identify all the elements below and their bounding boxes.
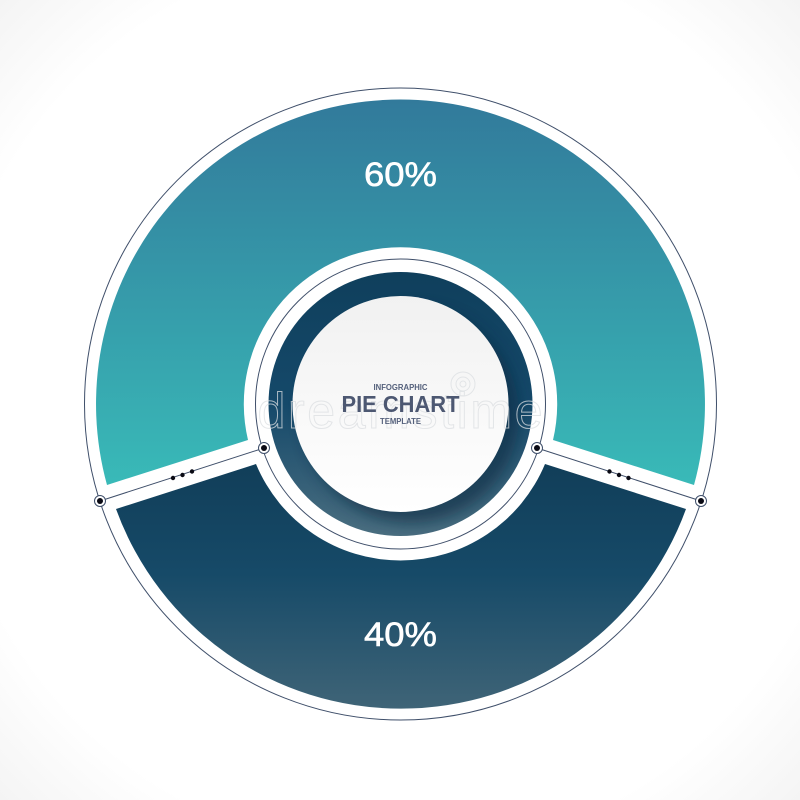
node: right outer [696,496,706,506]
text: template: TEMPLATE [380,417,422,426]
label: 40%: 40% [364,616,437,654]
disc shadow [303,307,519,523]
watermark logo [451,372,475,396]
text: pie chart: PIE CHART [342,391,460,417]
separator: right [532,442,706,506]
separator dots: left [171,469,194,480]
inner outline ring [256,259,546,549]
node: right inner [532,442,542,454]
segment: 40% [116,464,686,709]
separator: left [94,442,270,506]
separator dots: right [607,469,631,480]
node: left inner [258,442,270,454]
outer outline ring [84,88,716,720]
text: infographic: INFOGRAPHIC [374,383,428,392]
dark inner ring [268,272,532,536]
node: left outer [94,496,106,506]
watermark: dreamstime [258,383,542,439]
center disc [258,296,542,512]
label: 60%: 60% [364,156,437,194]
